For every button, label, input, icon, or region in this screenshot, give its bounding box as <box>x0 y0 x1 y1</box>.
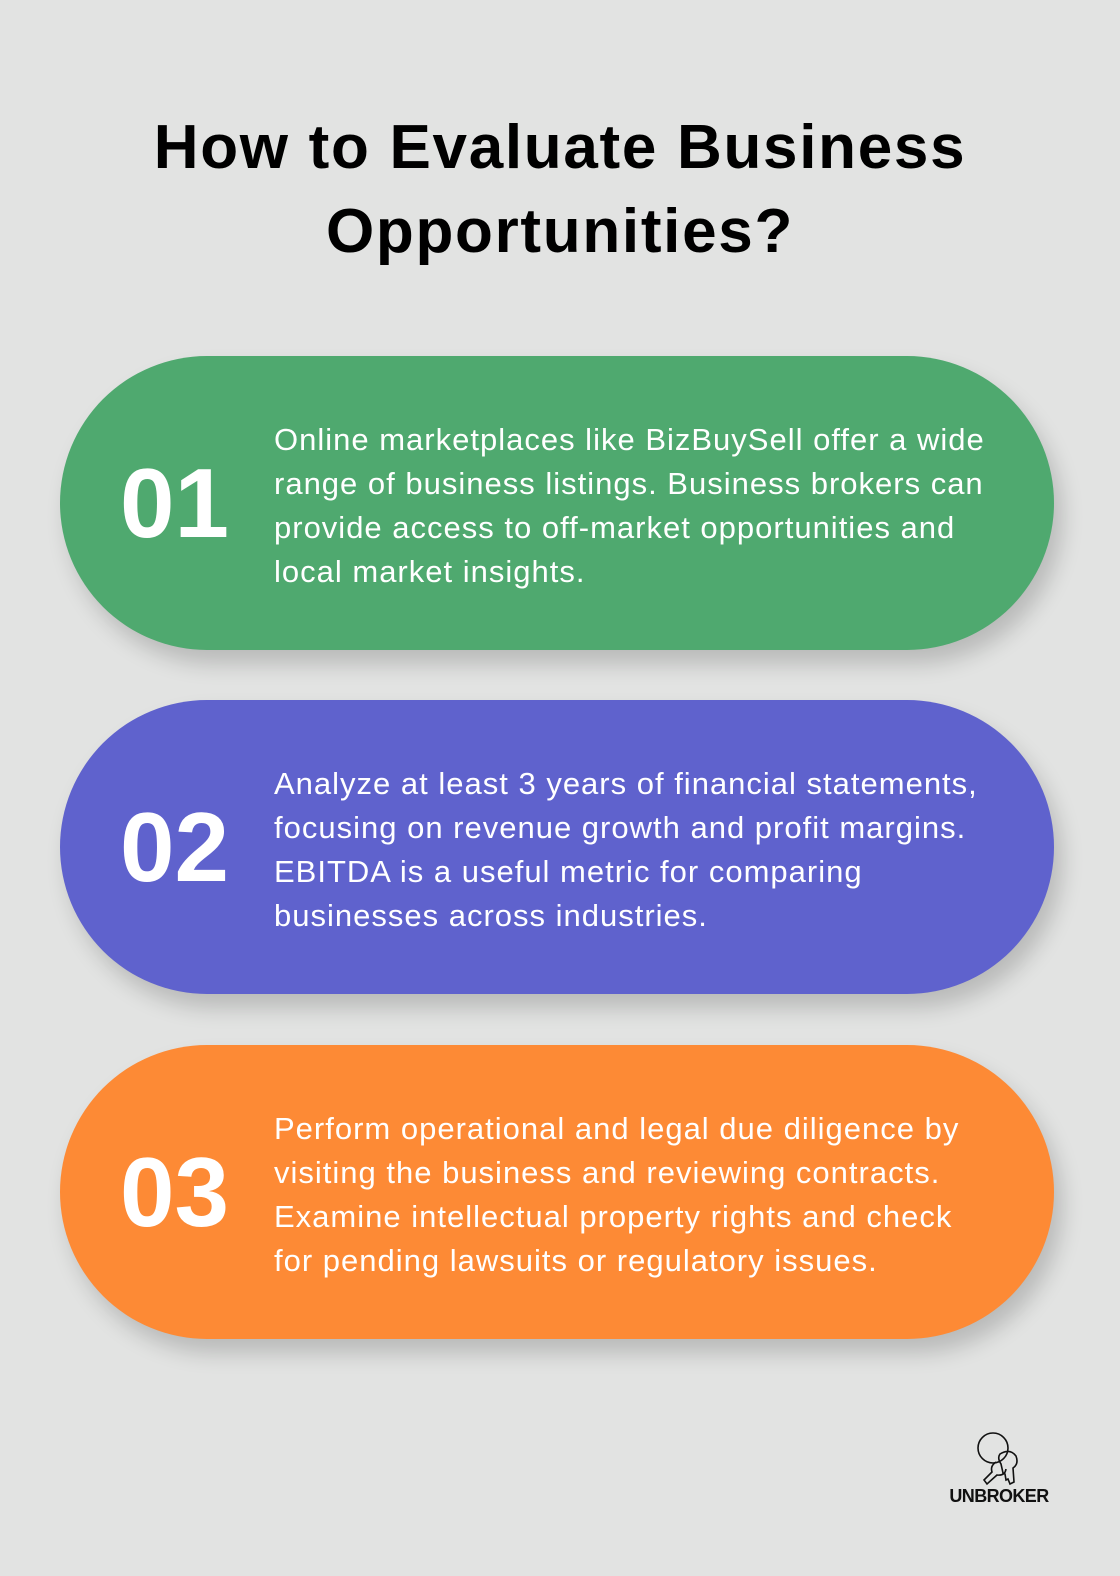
number 02: 02 <box>120 792 229 902</box>
text 03: for pending lawsuits or regulatory issues. <box>274 1243 878 1278</box>
text 02: focusing on revenue growth and profit margins. <box>274 810 966 845</box>
text 03 <box>274 1111 959 1278</box>
panel: step 03 <box>60 1045 1054 1339</box>
text 01: provide access to off-market opportunities and <box>274 510 955 545</box>
panel: step 02 <box>60 700 1054 994</box>
icon: keys <box>977 1432 1018 1486</box>
panel: step 01 <box>60 356 1054 650</box>
text 01 <box>274 422 985 589</box>
text 03: Perform operational and legal due diligence by <box>274 1111 959 1146</box>
text 01: Online marketplaces like BizBuySell offer a wide <box>274 422 985 457</box>
text 03: Examine intellectual property rights and check <box>274 1199 952 1234</box>
text 01: range of business listings. Business brokers can <box>274 466 984 501</box>
wordmark: UNBROKER <box>949 1486 1049 1506</box>
logo: unbroker <box>949 1432 1049 1506</box>
text 03: visiting the business and reviewing contracts. <box>274 1155 940 1190</box>
text 02: businesses across industries. <box>274 898 708 933</box>
text 02: Analyze at least 3 years of financial statements, <box>274 766 978 801</box>
text 02: EBITDA is a useful metric for comparing <box>274 854 863 889</box>
title: Opportunities? <box>326 197 794 266</box>
title <box>154 113 966 266</box>
number 03: 03 <box>120 1137 229 1247</box>
number 01: 01 <box>120 448 229 558</box>
title: How to Evaluate Business <box>154 113 966 182</box>
text 01: local market insights. <box>274 554 585 589</box>
text 02 <box>274 766 978 933</box>
